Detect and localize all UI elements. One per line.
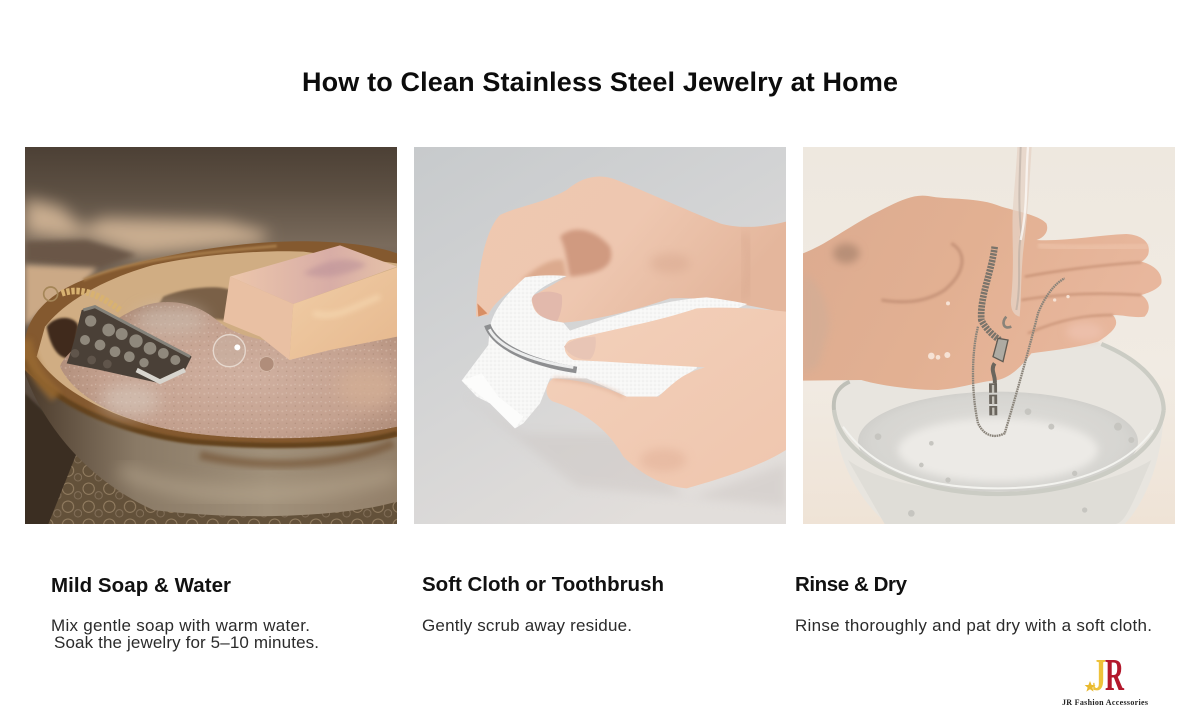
icon: gold star — [1085, 681, 1096, 692]
text block: mild soap instructions — [51, 616, 319, 652]
title: How to Clean Stainless Steel Jewelry at Home — [302, 67, 898, 97]
panel: rinse and dry photo illustration — [803, 147, 1175, 524]
text block: soft cloth instructions: Gently scrub away residue. — [422, 616, 632, 635]
glass bowl — [834, 325, 1164, 524]
heading: mild soap and water: Mild Soap & Water — [51, 574, 231, 597]
text block: mild soap instructions: Soak the jewelry for 5–10 minutes. — [54, 633, 319, 652]
panel: mild soap and water photo illustration — [25, 147, 397, 524]
logo wordmark: JR Fashion Accessories — [1062, 698, 1148, 707]
heading: soft cloth or toothbrush: Soft Cloth or Toothbrush — [422, 573, 664, 596]
soap foam — [60, 302, 397, 438]
text block: mild soap instructions: Mix gentle soap with warm water. — [51, 616, 310, 635]
heading: rinse and dry: Rinse & Dry — [795, 573, 908, 596]
logo: JR Fashion Accessories — [1062, 655, 1148, 707]
gold chain — [44, 287, 120, 310]
silver ring — [67, 306, 192, 383]
cream background — [803, 147, 1175, 524]
text block: rinse instructions: Rinse thoroughly and pat dry with a soft cloth. — [795, 616, 1152, 635]
soap bar — [223, 245, 397, 360]
open wet hand — [803, 196, 1162, 390]
soft shadow under the hands — [463, 393, 786, 507]
panel: soft cloth or toothbrush photo illustration — [414, 147, 786, 524]
ceramic bowl — [25, 241, 397, 516]
white towel — [462, 275, 747, 428]
running water stream — [1011, 147, 1032, 317]
foam under the bowl — [48, 453, 397, 524]
upper hand — [476, 177, 786, 323]
lower hand — [546, 308, 786, 488]
wooden table background — [25, 147, 397, 524]
stainless steel ring — [487, 325, 577, 370]
silver chain necklaces — [973, 247, 1065, 436]
grey surface background — [414, 147, 786, 524]
large bubble — [213, 335, 274, 371]
